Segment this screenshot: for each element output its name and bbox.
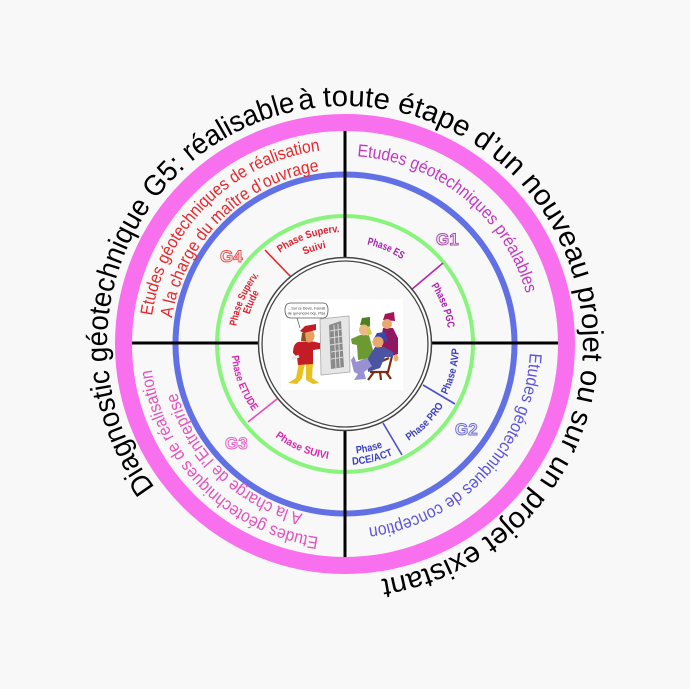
green figure [351, 317, 373, 360]
speech bubble [285, 303, 328, 328]
phase: Phase PGC: Phase PGC [432, 282, 455, 328]
phase: Phase DCE/ACT line 1: Phase [356, 442, 382, 454]
G1 heading: Etudes géotechniques préalables [358, 144, 534, 292]
title: curved outer text: Diagnostic géotechnique G5: réalisable [86, 95, 294, 497]
phase: Phase Superv. Etude line 2: Etude [242, 290, 258, 314]
phase divider: G2 PRO/DCE [383, 423, 402, 455]
G3 heading line 1: Etudes géotechniques de réalisation [142, 370, 318, 549]
quadrant separators [132, 131, 558, 557]
G2 heading: Etudes géotechniques de conception [369, 354, 542, 537]
blue ring [176, 174, 514, 514]
phase: Phase Superv. Suivi line 2: Suivi [302, 240, 326, 254]
plan with leaning tower [320, 316, 350, 375]
speech bubble: …Sur ce Devis, il serait [288, 306, 325, 310]
label: G2: G2 [455, 420, 478, 439]
label: G3: G3 [225, 434, 248, 453]
phase: Phase Superv. Etude line 1: Phase Superv. [229, 274, 259, 326]
phase: Phase Superv. Suivi line 1: Phase Superv. [276, 226, 339, 252]
phase divider: G3 [248, 399, 277, 422]
phase divider: G2 AVP/PRO [423, 385, 455, 404]
central cartoon illustration [281, 299, 403, 390]
speech bubble: de qui encore bcp. Pisa [288, 312, 325, 316]
G4 heading line 2: A la charge du maître d’ouvrage [160, 162, 318, 318]
phase: Phase ES: Phase ES [368, 238, 405, 258]
G4 heading line 1: Etudes géotechniques de réalisation [140, 142, 320, 315]
G3 heading line 2: A la charge de l’Entreprise [168, 394, 303, 524]
seated blue figure [351, 332, 393, 380]
purple figure [380, 312, 398, 362]
chair [368, 356, 392, 380]
red figure [288, 324, 320, 384]
phase: Phase SUIVI: Phase SUIVI [276, 431, 329, 459]
title: curved outer text [86, 88, 604, 598]
centre double circle [258, 258, 432, 430]
phase divider: G4 [265, 250, 291, 277]
phase: Phase DCE/ACT line 2: DCE/ACT [352, 448, 391, 465]
green ring [217, 216, 473, 472]
outer magenta ring [124, 122, 566, 566]
title: curved outer text: à toute étape d’un nouveau projet ou sur un projet existant [300, 88, 604, 598]
label: G1: G1 [436, 230, 459, 249]
phase divider: G1 [411, 263, 443, 290]
label: G4: G4 [220, 247, 243, 266]
phase: Phase AVP: Phase AVP [440, 348, 459, 394]
phase: Phase PRO: Phase PRO [405, 402, 442, 440]
phase: Phase ETUDE: Phase ETUDE [232, 356, 258, 411]
